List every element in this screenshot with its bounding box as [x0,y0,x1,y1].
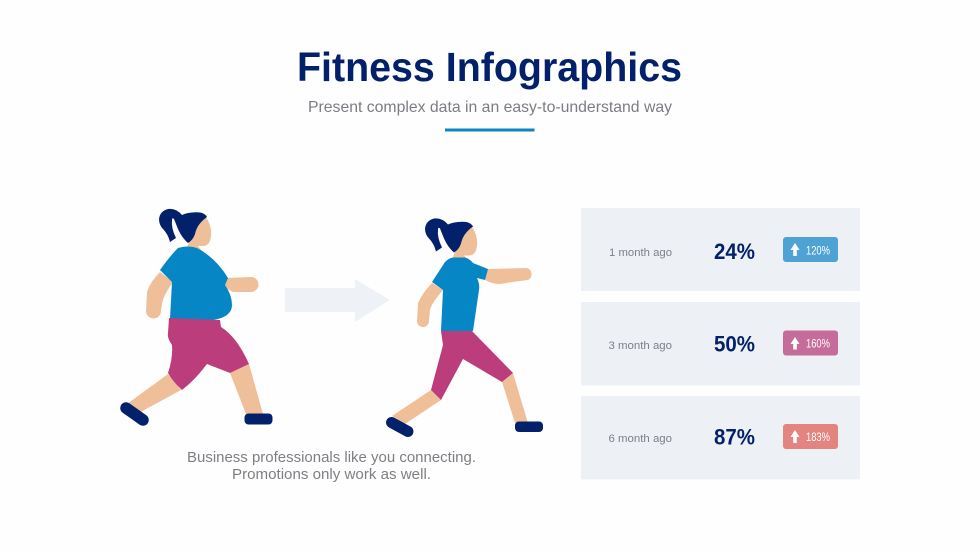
front shoe [244,414,272,424]
value: 50% [714,332,755,356]
value: 87% [714,424,755,450]
title underline [445,128,534,132]
back arm [146,272,173,318]
badge [783,237,838,262]
caption [187,449,476,483]
front arm [224,277,258,292]
head and ponytail [425,218,477,262]
badge: 160% [806,338,830,350]
blue shirt [432,258,488,331]
magenta shorts [168,318,249,390]
front leg [230,364,263,414]
back leg [127,374,181,414]
badge [783,424,838,449]
period label: 1 month ago [609,247,672,259]
badge: 183% [806,432,830,444]
front leg [502,373,528,423]
panel: 1 month ago [581,208,860,291]
panel: 3 month ago [581,302,860,386]
figure: before, larger runner [126,209,272,424]
period label: 3 month ago [608,340,672,352]
arrow [285,279,390,322]
back shoe [126,408,143,420]
magenta shorts [431,331,513,400]
front arm [485,268,532,284]
head and ponytail [159,209,211,252]
panel: 6 month ago [581,396,860,480]
back shoe [392,422,408,432]
front shoe [515,422,543,432]
back leg [392,390,441,424]
blue shirt [160,246,232,320]
badge [783,330,838,356]
value: 24% [714,239,755,264]
caption: Business professionals like you connecting. [187,449,476,466]
back arm [417,283,443,327]
badge: 120% [806,246,830,258]
title: Fitness Infographics [297,44,682,90]
caption: Promotions only work as well. [232,466,431,483]
subtitle: Present complex data in an easy-to-understand way [308,99,672,116]
figure: after, slimmer runner [392,218,543,432]
period label: 6 month ago [608,433,672,445]
